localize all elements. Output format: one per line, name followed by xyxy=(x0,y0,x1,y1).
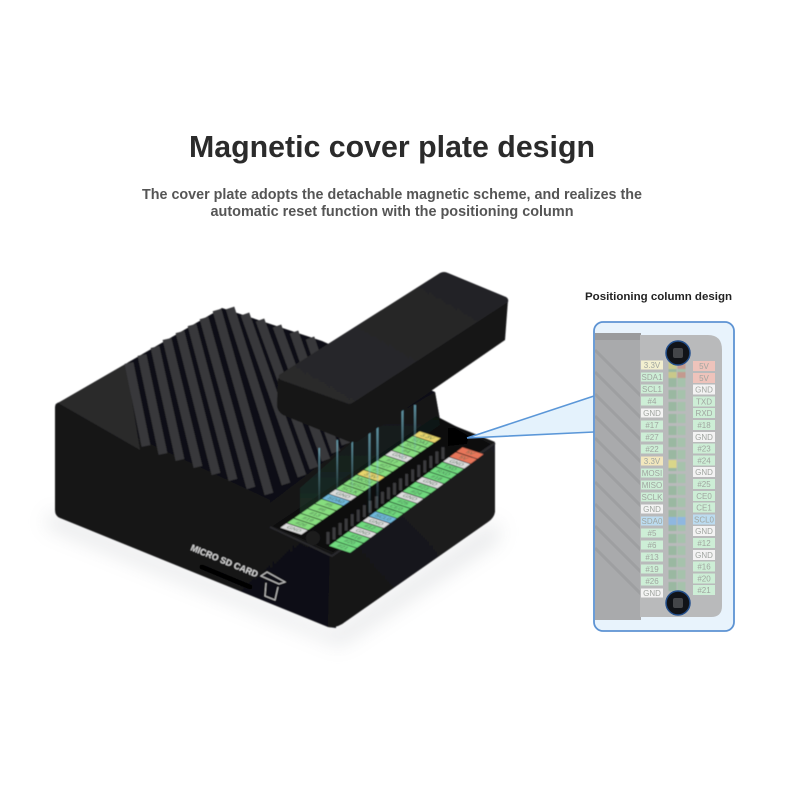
pin labels: right column: GND xyxy=(695,468,713,477)
GPIO labels: front row: CE0 xyxy=(388,504,404,511)
pin labels: right column: #23 xyxy=(697,444,711,454)
pin labels: right column: #21 xyxy=(697,586,711,595)
GPIO labels: front row: #21 xyxy=(335,544,349,551)
icon: top positioning column xyxy=(666,341,690,365)
pin labels: left column: #27 xyxy=(645,433,659,442)
GPIO labels: back row: #5 xyxy=(323,503,334,508)
GPIO labels: front row: #20 xyxy=(342,539,356,546)
GPIO labels: front row: #12 xyxy=(362,525,376,531)
GPIO labels: front row: CE1 xyxy=(381,509,397,516)
GPIO labels: front row: 5V xyxy=(464,451,475,456)
pin labels: left column: #5 xyxy=(648,529,657,538)
pin labels: left column: 3.3V xyxy=(644,457,661,466)
pin labels: left column: MOSI xyxy=(642,469,662,478)
pin labels: left column: #13 xyxy=(645,553,659,562)
GPIO labels: back row: SCLK xyxy=(339,487,360,495)
case top left face xyxy=(58,364,140,450)
positioning hole xyxy=(448,428,469,446)
pin labels: right column: GND xyxy=(695,527,713,536)
pin labels: right column: RXD xyxy=(696,409,713,418)
cover left face xyxy=(277,378,352,443)
GPIO labels: back row: SDA1 xyxy=(409,438,429,446)
pin labels: left column: SDA1 xyxy=(642,373,663,382)
case backing xyxy=(58,308,495,556)
GPIO labels: front row: #25 xyxy=(395,500,409,506)
GPIO labels: back row: MOSI xyxy=(353,477,374,485)
pin labels: left column: SDA0 xyxy=(642,517,663,526)
pin labels: left column: SCLK xyxy=(642,493,663,502)
board plate xyxy=(640,335,722,617)
GPIO labels: front row: #18 xyxy=(429,475,443,481)
device shadow xyxy=(45,512,498,645)
header pins xyxy=(671,360,683,592)
tray rim xyxy=(270,443,495,556)
magnetic cover xyxy=(277,272,508,443)
pin labels: right column: GND xyxy=(695,386,713,394)
icon: SD card insert xyxy=(261,572,285,600)
pin labels: right column: SCL0 xyxy=(694,516,715,524)
GPIO labels: back row: GND xyxy=(284,526,302,533)
GPIO labels: back row: #4 xyxy=(400,449,412,455)
pin labels: right column: 5V xyxy=(699,362,710,371)
GPIO labels: front row: GND xyxy=(400,494,418,502)
pin labels: left column: MISO xyxy=(642,481,662,490)
pin labels: right column: #12 xyxy=(697,539,711,548)
translucent glow under the cover xyxy=(300,395,440,522)
heat sink fins xyxy=(129,308,346,494)
pin labels: right column: CE0 xyxy=(696,492,712,501)
case section xyxy=(595,333,641,620)
GPIO labels: back row: #26 xyxy=(293,521,308,528)
pin labels: left column xyxy=(641,360,663,598)
pin labels: right column: #16 xyxy=(697,562,711,572)
GPIO labels: back row: #27 xyxy=(377,463,392,470)
pin labels: left column: #19 xyxy=(645,565,659,574)
pin labels: left column: #6 xyxy=(648,541,657,550)
GPIO labels: front row: GND xyxy=(353,529,371,536)
GPIO labels: back row: #6 xyxy=(316,507,327,513)
pin labels: right column: #25 xyxy=(697,480,711,489)
GPIO labels: back row: #13 xyxy=(307,512,322,518)
alignment light rays xyxy=(318,405,416,520)
GPIO labels: front row: RXD xyxy=(434,470,451,477)
GPIO labels: back row xyxy=(280,431,441,535)
cover right face xyxy=(350,300,508,442)
pin labels: left column: GND xyxy=(643,589,661,598)
subtitle xyxy=(142,187,642,220)
GPIO labels: front row: #24 xyxy=(409,490,423,496)
title: Magnetic cover plate design xyxy=(189,129,595,164)
cover top face xyxy=(279,272,508,404)
GPIO labels: front row xyxy=(329,447,484,553)
pin labels: left column: #26 xyxy=(645,577,659,586)
GPIO labels: front row: TXD xyxy=(441,465,457,472)
positioning peg xyxy=(306,531,320,545)
GPIO labels: back row: 3.3V xyxy=(418,434,435,441)
pin labels: left column: #4 xyxy=(648,397,657,406)
pin labels: right column: CE1 xyxy=(696,504,712,512)
GPIO labels: back row: GND xyxy=(333,492,351,499)
micro SD label: MICRO SD CARD xyxy=(189,543,260,579)
subtitle: The cover plate adopts the detachable magnetic scheme, and realizes the xyxy=(142,187,642,203)
GPIO labels: front row: GND xyxy=(420,479,438,487)
panel frame xyxy=(594,322,734,631)
pin labels: right column: GND xyxy=(695,551,713,560)
pin labels: left column: 3.3V xyxy=(644,361,661,370)
GPIO labels: front row: #23 xyxy=(415,485,430,491)
case stripes xyxy=(595,350,640,595)
pin labels: right column: #18 xyxy=(697,421,711,430)
subtitle: automatic reset function with the positioning column xyxy=(210,204,574,220)
GPIO labels: front row: GND xyxy=(367,519,384,527)
detail heading: Positioning column design xyxy=(585,291,732,303)
pin labels: left column: GND xyxy=(643,409,661,418)
pin labels: left column: #17 xyxy=(645,421,659,430)
GPIO pin posts xyxy=(328,447,443,544)
GPIO labels: front row: SCL0 xyxy=(373,514,392,522)
pin labels: right column: #24 xyxy=(697,456,711,466)
pin labels: left column: SCL1 xyxy=(642,385,663,394)
tray interior xyxy=(270,392,495,556)
GPIO labels: back row: #17 xyxy=(384,458,399,465)
GPIO labels: back row: MISO xyxy=(346,482,367,490)
GPIO labels: front row: GND xyxy=(447,460,465,467)
pin labels: left column: #22 xyxy=(645,445,659,454)
GPIO labels: front row: 5V xyxy=(457,456,469,461)
pin labels: right column: 5V xyxy=(699,374,710,383)
case front face xyxy=(55,402,336,628)
callout beam to detail panel xyxy=(467,396,594,438)
GPIO labels: back row: GND xyxy=(389,453,407,461)
pin labels: left column: GND xyxy=(643,505,661,514)
GPIO labels: back row: #22 xyxy=(370,468,385,475)
pin labels: right column xyxy=(693,361,715,595)
pin labels: right column: GND xyxy=(695,433,713,442)
tray floor xyxy=(273,416,490,552)
pin labels: right column: #20 xyxy=(697,574,711,584)
case right face xyxy=(328,444,495,627)
panel: positioning column detail xyxy=(594,322,734,631)
GPIO labels: back row: #19 xyxy=(300,517,315,523)
GPIO labels: front row: #16 xyxy=(348,534,363,541)
GPIO labels: back row: SDA0 xyxy=(325,496,345,504)
device: aluminium case with magnetic cover xyxy=(55,272,508,628)
icon: bottom positioning column xyxy=(666,591,690,615)
GPIO labels: back row: SCL1 xyxy=(403,443,422,451)
micro SD slot xyxy=(202,567,250,587)
pin labels: right column: TXD xyxy=(696,398,712,406)
GPIO labels: back row: 3.3V xyxy=(362,473,379,480)
